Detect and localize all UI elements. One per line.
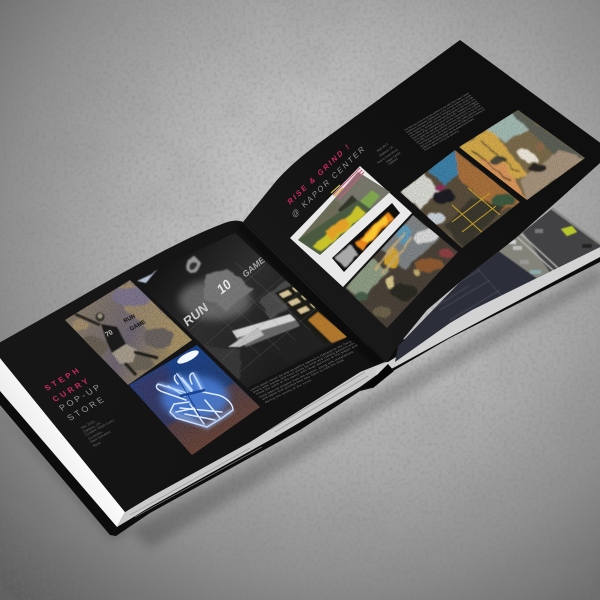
text block: Kapor Center credits: Sept 2017, xyxy=(376,142,390,153)
text block: Kapor Center description: and lifts from morning until the evening light faded on the block. xyxy=(415,104,483,144)
photo: middle mural with scaffold xyxy=(400,150,520,248)
text block: Kapor Center description: The finished piece now greets everyone who walks past the corner xyxy=(417,106,484,146)
text block: Kapor Center credits: Kapor Center xyxy=(385,151,402,164)
heading: Steph Curry Pop-Up Store xyxy=(43,365,108,423)
mural lettering: GAME xyxy=(241,254,266,280)
photo: neon hand xyxy=(129,345,260,455)
text block: Kapor Center description: Photos taken during the painting. xyxy=(423,130,460,152)
next page aerial photo xyxy=(395,208,600,362)
photo: top mural with painter xyxy=(459,110,585,200)
back cover xyxy=(0,245,600,536)
left page xyxy=(0,221,385,512)
book shadow xyxy=(0,268,600,548)
mural lettering: 10 xyxy=(215,276,233,298)
text block: Kapor Center credits: Rise & Grind Mural xyxy=(376,148,399,165)
text block: left page caption: filled the walls of the space with large portraits of the player and xyxy=(255,344,359,396)
left page block edge xyxy=(0,358,378,527)
text block: left page caption: and lights that greeted fans who came to visit the shop xyxy=(261,358,345,401)
text block: Kapor Center description: over several days of the summer, bringing color to the street with xyxy=(407,96,475,136)
panel: left page photos xyxy=(60,230,350,460)
text block: Kapor Center credits xyxy=(376,142,402,166)
text block: Kapor Center description: building in downtown Oakland by a crew of local artists and youth xyxy=(405,94,473,134)
text block: Steph Curry credits: Co-Artists: xyxy=(87,430,104,441)
text block: Kapor Center description: and a scale model was also shown in the lobby of the building for xyxy=(419,108,486,148)
text block: Kapor Center credits: Oakland, CA. xyxy=(378,145,395,158)
spine tab xyxy=(366,364,394,388)
chain link net lines xyxy=(190,262,320,372)
text block: Kapor Center description: visitors to see how the design was developed by the team. xyxy=(421,118,476,150)
text block: Steph Curry credits: Rene xyxy=(92,441,102,448)
mural lettering: 70 xyxy=(104,329,115,339)
mural lettering: RUN xyxy=(123,314,137,325)
text block: Kapor Center description: by to watch the wall take shape, and the crew worked from scaffold xyxy=(413,102,481,142)
heading: Steph Curry Pop-Up Store: POP-UP xyxy=(57,381,104,413)
text block: Kapor Center description: The Rise and Grind mural was painted on the wall of the Kapor Center xyxy=(403,92,470,132)
mural lettering xyxy=(104,314,146,337)
text block: Steph Curry credits: Dave Schubert, xyxy=(89,430,112,444)
heading: Rise and Grind at Kapor Center: @ KAPOR CENTER xyxy=(290,143,367,220)
text block: Steph Curry credits xyxy=(80,418,115,448)
photo: Steph Curry wall mural xyxy=(65,280,192,385)
text block: Kapor Center description: hard work of the community around the center. Neighbours stopped xyxy=(411,100,479,140)
text block: Kapor Center description: bold lettering, animals and portraits that speak to the hustle and xyxy=(409,98,477,138)
text block: Steph Curry credits: Curated: Steph Curry xyxy=(84,418,115,437)
heading: Steph Curry Pop-Up Store: STORE xyxy=(65,394,108,423)
photo: bottom mural xyxy=(345,215,458,328)
neon hand outline xyxy=(156,373,233,427)
right page xyxy=(243,40,600,362)
text block: Kapor Center credits: Oakland xyxy=(387,157,399,166)
right page block edge xyxy=(373,245,600,376)
mural lettering: GAME xyxy=(129,319,147,333)
heading: Steph Curry Pop-Up Store: CURRY xyxy=(51,376,93,404)
heading: Rise and Grind at Kapor Center: RISE & GRIND ! xyxy=(286,141,352,207)
mural lettering xyxy=(183,257,265,326)
heading: Steph Curry Pop-Up Store: STEPH xyxy=(43,365,83,393)
text block: left page caption: Lorem ipsum street art pop-up gallery opened in Oakland for the Curry xyxy=(249,340,353,392)
panel: right page photos xyxy=(290,105,590,335)
text block: left page caption: hand lettered slogans from the season, along with installations xyxy=(258,350,355,399)
text block: Steph Curry credits: Dec 2016, xyxy=(80,419,96,430)
photo: black and white mural xyxy=(130,230,350,390)
photo: Rise and Grind screenshot collage xyxy=(290,165,412,287)
mural lettering: RUN xyxy=(181,299,210,330)
text block: Steph Curry credits: Oakland, CA. xyxy=(82,421,102,434)
text block: left page caption: during the weeks of the event. xyxy=(264,378,314,404)
text block: Kapor Center description xyxy=(403,92,486,152)
text block: left page caption: brand with murals and neon works by local and visiting painters who xyxy=(252,342,356,394)
gutter shadow xyxy=(236,222,385,364)
